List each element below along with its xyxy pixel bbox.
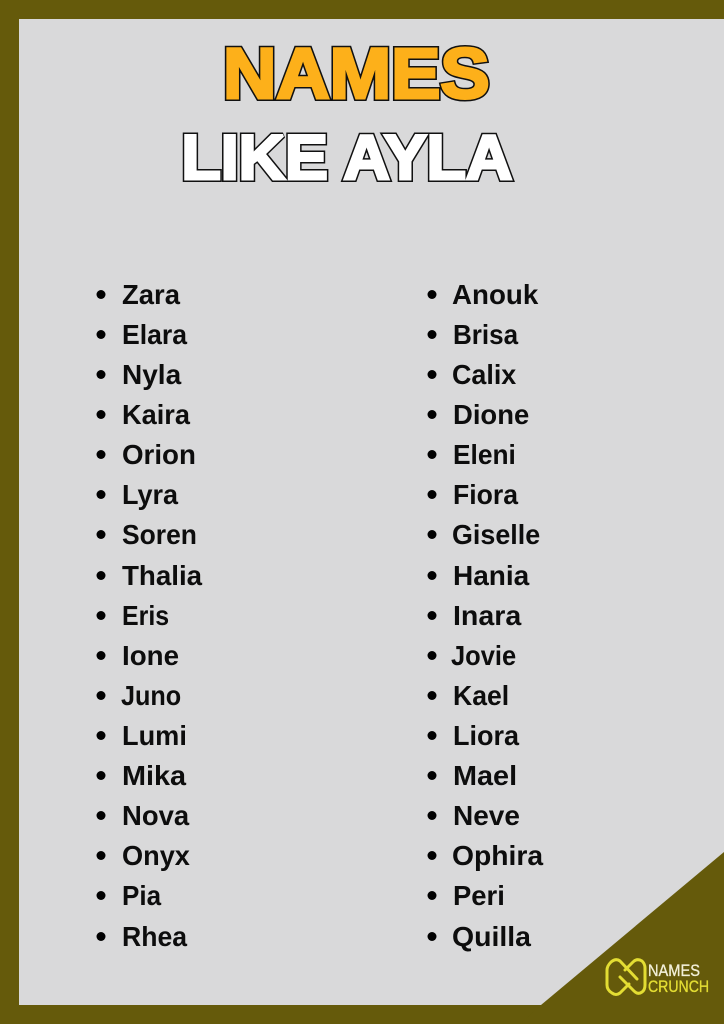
right name list: Kael	[453, 679, 509, 711]
left name list: Zara	[122, 279, 181, 310]
icon: N mark	[607, 960, 645, 994]
right name list: Peri	[453, 880, 505, 911]
right name list: Jovie	[451, 640, 516, 671]
right name list: Eleni	[453, 438, 516, 470]
right name list: Fiora	[453, 478, 519, 510]
title: like ayla: LIKE AYLA	[182, 123, 512, 193]
title: like ayla: LIKE AYLA	[182, 123, 512, 193]
left name list: Onyx	[122, 840, 191, 871]
right name list: Brisa	[453, 319, 519, 350]
right name list: Quilla	[452, 920, 531, 952]
corner triangle	[520, 852, 724, 1024]
right name list: Hania	[453, 560, 530, 591]
right name list: Giselle	[452, 518, 540, 550]
title: names: NAMES	[223, 34, 490, 114]
left name list: Elara	[122, 318, 188, 350]
left name list: Orion	[122, 439, 196, 470]
left name list: Lyra	[122, 479, 179, 510]
left name list: Pia	[122, 880, 162, 911]
left name list: Mika	[122, 760, 186, 792]
right name list: Neve	[453, 800, 520, 831]
left name list: Lumi	[122, 720, 187, 751]
logo: names crunch	[607, 960, 709, 996]
right name list: Mael	[453, 760, 517, 792]
left name list: Rhea	[122, 920, 188, 952]
left name list: Eris	[122, 600, 169, 631]
right name list: Anouk	[452, 279, 539, 310]
left name list: Soren	[122, 518, 197, 550]
left name list: Nova	[122, 800, 190, 831]
left name list	[96, 279, 203, 952]
logo text: names: NAMES	[648, 962, 700, 980]
right name list: Liora	[453, 720, 520, 751]
left name list: Thalia	[122, 560, 203, 591]
left name list: Nyla	[122, 359, 182, 390]
title: names: NAMES	[223, 34, 490, 114]
right name list: Calix	[452, 358, 517, 390]
right name list	[428, 279, 543, 952]
left name list: Kaira	[122, 399, 191, 430]
right name list: Inara	[453, 599, 522, 631]
right name list: Ophira	[452, 840, 543, 871]
right name list: Dione	[453, 399, 529, 430]
logo text: crunch: CRUNCH	[648, 978, 709, 996]
left name list: Ione	[122, 640, 179, 671]
left name list: Juno	[121, 680, 181, 711]
